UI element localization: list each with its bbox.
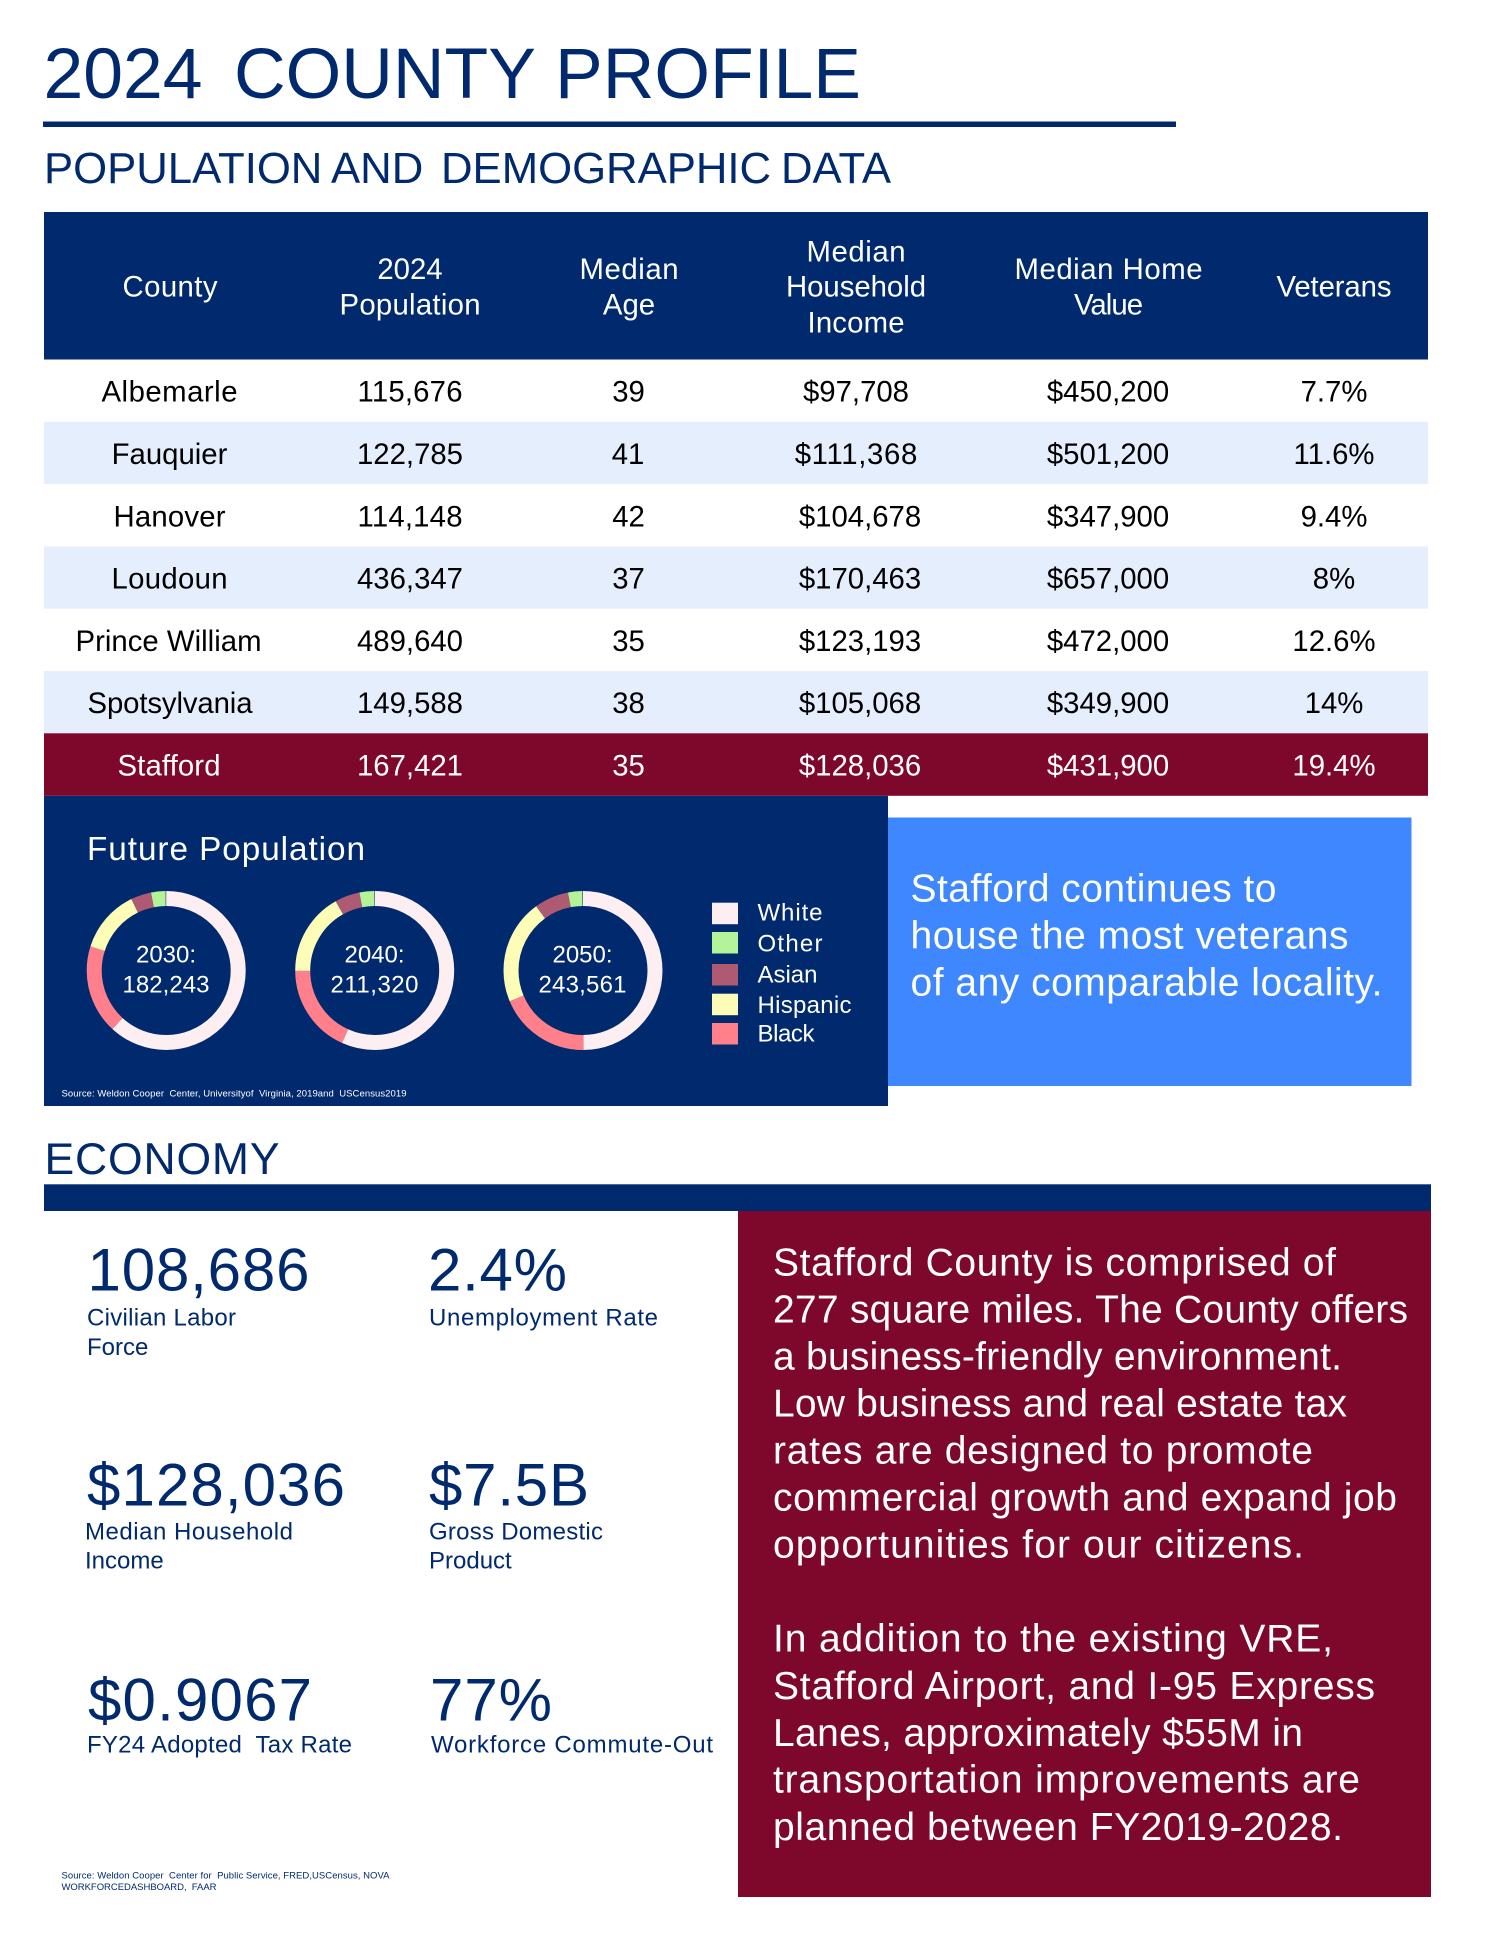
table header row: Age [603, 289, 655, 322]
stat: unemployment rate: Unemployment Rate [429, 1305, 658, 1332]
callout: veterans: house the most veterans [910, 914, 1348, 958]
chart legend: Black [758, 1021, 816, 1048]
chart legend: Other [758, 931, 822, 958]
row: Albemarle: Albemarle [102, 376, 238, 409]
row: Hanover: 114,148 [358, 500, 462, 533]
row: Prince William [76, 625, 1376, 658]
row: Prince William: $472,000 [1047, 625, 1169, 658]
row: Prince William: $123,193 [799, 625, 921, 658]
panel: county description [738, 1211, 1431, 1897]
row: Fauquier: 122,785 [357, 438, 463, 471]
row: Albemarle: 39 [612, 376, 645, 409]
paragraph: business environment: a business-friendly environment. [773, 1336, 1342, 1378]
stat: civilian labor force [87, 1237, 310, 1361]
row: Prince William: 489,640 [357, 625, 463, 658]
title rule [43, 122, 1176, 127]
row: Stafford highlighted: 167,421 [357, 750, 463, 782]
stat: tax rate: FY24 Adopted Tax Rate [87, 1732, 352, 1759]
row: Hanover: $347,900 [1047, 500, 1169, 533]
row: Loudoun: 37 [612, 563, 645, 596]
row: Stafford highlighted: $128,036 [799, 750, 921, 782]
paragraph: transportation: planned between FY2019-2028. [773, 1806, 1343, 1849]
row: Fauquier: 11.6% [1294, 438, 1374, 471]
row: Spotsylvania: 14% [1305, 687, 1363, 720]
row: Fauquier [44, 422, 1428, 484]
row: Prince William: Prince William [76, 625, 262, 658]
donut chart: 2030 [94, 898, 238, 1042]
donut chart: 2050 [511, 898, 655, 1042]
paragraph: business environment: opportunities for our citizens. [773, 1524, 1304, 1566]
table header row: Median [580, 253, 678, 286]
row: Hanover [114, 500, 1367, 533]
stat: civilian labor force: Force [87, 1334, 148, 1361]
row: Spotsylvania: $105,068 [799, 687, 921, 720]
stat: unemployment rate: 2.4% [428, 1237, 567, 1304]
donut chart: 2050: 2050: [552, 942, 613, 969]
row: Hanover: 42 [612, 500, 645, 533]
row: Loudoun: 436,347 [357, 563, 463, 596]
economy bar [44, 1184, 1431, 1211]
paragraph: business environment: rates are designed to promote [773, 1430, 1313, 1472]
source note: economy: Source: Weldon Cooper Center for Public Service, FRED,USCensus, NOVA [62, 1870, 390, 1881]
heading: population and demographic data: DATA [781, 144, 892, 193]
row: Albemarle: 7.7% [1301, 376, 1367, 409]
paragraph: transportation [773, 1618, 1375, 1849]
table header row: Veterans [1276, 271, 1392, 304]
row: Stafford highlighted: 35 [612, 750, 645, 782]
stat: tax rate: $0.9067 [88, 1667, 312, 1734]
row: Prince William: 35 [612, 625, 645, 658]
table header row: Household [786, 271, 926, 304]
table header row: Median [806, 235, 906, 268]
row: Albemarle: $97,708 [803, 376, 909, 409]
row: Spotsylvania: $349,900 [1047, 687, 1169, 720]
row: Spotsylvania: Spotsylvania [88, 687, 253, 720]
row: Fauquier: $501,200 [1047, 438, 1169, 471]
stat: gross domestic product: Gross Domestic [429, 1518, 603, 1545]
row: Prince William: 12.6% [1292, 625, 1376, 658]
chart legend: Asian [758, 962, 818, 989]
source note: economy [62, 1870, 390, 1893]
row: Stafford highlighted: Stafford [118, 750, 220, 782]
table header row: 2024 [377, 253, 443, 286]
donut chart: 2030: 2030: [136, 942, 196, 969]
row: Stafford highlighted: $431,900 [1047, 750, 1169, 782]
callout: veterans: of any comparable locality. [910, 962, 1382, 1004]
stat: gross domestic product [429, 1452, 603, 1575]
stat: gross domestic product: $7.5B [429, 1452, 589, 1519]
row: Hanover: Hanover [114, 500, 226, 533]
stat: median household income: $128,036 [87, 1452, 345, 1519]
row: Fauquier: $111,368 [795, 438, 917, 471]
row: Albemarle [102, 376, 1367, 409]
paragraph: transportation: In addition to the existing VRE, [773, 1618, 1333, 1661]
stat: civilian labor force: Civilian Labor [87, 1305, 236, 1332]
title: PROFILE [555, 34, 861, 114]
row: Fauquier: Fauquier [112, 438, 228, 471]
donut chart: 2040: 2040: [344, 942, 405, 969]
heading: population and demographic data: DEMOGRAPHIC [441, 144, 771, 193]
stat: workforce commute-out: 77% [430, 1667, 552, 1734]
stat: gross domestic product: Product [429, 1548, 512, 1575]
paragraph: transportation: transportation improvements are [773, 1759, 1360, 1802]
source note: economy: WORKFORCEDASHBOARD, FAAR [62, 1882, 217, 1893]
paragraph: transportation: Lanes, approximately $55M in [773, 1712, 1303, 1755]
heading: population and demographic data: AND [331, 144, 423, 193]
paragraph: business environment: commercial growth and expand job [773, 1476, 1397, 1520]
donut chart: 2050: 243,561 [538, 972, 626, 999]
row: Loudoun: $170,463 [799, 563, 921, 596]
callout: veterans: Stafford continues to [910, 868, 1276, 910]
stat: workforce commute-out: Workforce Commute-Out [431, 1732, 713, 1759]
source note: future population: Source: Weldon Cooper Center, Universityof Virginia, 2019and USCensus2019 [62, 1089, 406, 1100]
future population heading: Future Population [87, 831, 365, 868]
heading: population and demographic data: POPULATION [44, 144, 322, 193]
stat: civilian labor force: 108,686 [88, 1237, 310, 1304]
chart legend [712, 900, 852, 1048]
table header row: Value [1074, 289, 1143, 322]
donut chart: 2040: 211,320 [330, 972, 418, 999]
paragraph: business environment: Low business and real estate tax [773, 1382, 1348, 1426]
chart legend: Hispanic [758, 992, 852, 1019]
table header row: Income [808, 306, 904, 339]
stat: tax rate [87, 1667, 352, 1759]
table header row [44, 212, 1428, 360]
stat: median household income [85, 1452, 345, 1575]
stat: median household income: Income [85, 1548, 164, 1575]
row: Spotsylvania: 149,588 [357, 687, 463, 720]
row: Fauquier: 41 [612, 438, 644, 471]
row: Loudoun: 8% [1313, 563, 1355, 596]
stat: workforce commute-out [430, 1667, 713, 1759]
paragraph: transportation: Stafford Airport, and I-95 Express [773, 1665, 1375, 1708]
table: county comparison [44, 212, 1428, 796]
chart legend: White [758, 900, 822, 927]
callout: veterans [888, 818, 1412, 1086]
table header row: Population [340, 289, 480, 322]
row: Hanover: 9.4% [1301, 500, 1367, 533]
row: Loudoun: Loudoun [112, 563, 228, 596]
row: Loudoun: $657,000 [1047, 563, 1169, 596]
row: Albemarle: $450,200 [1047, 376, 1169, 409]
heading: economy: ECONOMY [44, 1135, 280, 1184]
panel: future population [44, 796, 888, 1106]
paragraph: business environment [773, 1242, 1408, 1566]
stat: median household income: Median Household [85, 1518, 293, 1545]
row: Stafford highlighted [44, 733, 1428, 796]
title: COUNTY [234, 34, 536, 114]
row: Spotsylvania [44, 671, 1428, 733]
row: Loudoun [44, 546, 1428, 609]
table header row: Median Home [1014, 253, 1202, 286]
paragraph: business environment: Stafford County is comprised of [773, 1242, 1336, 1284]
row: Hanover: $104,678 [799, 500, 921, 533]
table header row: County [122, 271, 218, 304]
row: Albemarle: 115,676 [358, 376, 462, 409]
row: Stafford highlighted: 19.4% [1292, 750, 1376, 782]
title: 2024 [44, 34, 203, 114]
donut chart: 2030: 182,243 [122, 972, 210, 999]
donut chart: 2040 [303, 898, 447, 1042]
paragraph: business environment: 277 square miles. The County offers [773, 1288, 1408, 1332]
row: Spotsylvania: 38 [612, 687, 645, 720]
stat: unemployment rate [428, 1237, 658, 1332]
